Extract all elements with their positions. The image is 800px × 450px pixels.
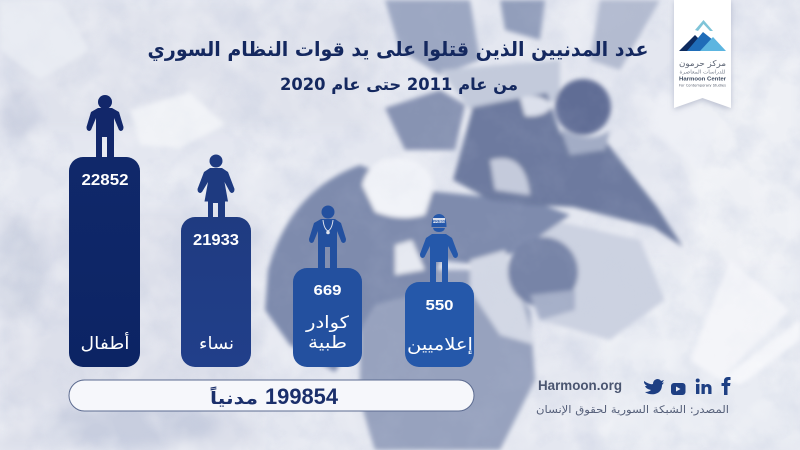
lower person and mid tone xyxy=(360,270,535,450)
upper figures xyxy=(385,0,480,75)
icon: twitter xyxy=(644,379,664,394)
lower right rubble xyxy=(690,260,790,380)
value: 22852 xyxy=(82,172,129,189)
label xyxy=(305,313,350,353)
bar: children xyxy=(69,95,140,367)
bar: media workers xyxy=(405,214,474,367)
logo text: Harmoon Center xyxy=(679,76,727,82)
logo text xyxy=(679,59,727,88)
logo mountains xyxy=(679,20,726,51)
label: أطفال xyxy=(80,332,130,354)
label: إعلاميين xyxy=(407,335,473,355)
bar: women xyxy=(181,154,251,367)
value: 669 xyxy=(314,282,342,299)
icon: linkedin xyxy=(696,378,712,394)
value: 550 xyxy=(426,297,454,314)
icon: medic xyxy=(309,206,346,268)
logo ribbon xyxy=(674,0,731,108)
title: عدد المدنيين الذين قتلوا على يد قوات النظام السوري xyxy=(148,37,648,62)
label: طبية xyxy=(308,333,347,353)
icon: child xyxy=(86,95,124,157)
icon: youtube xyxy=(671,383,686,395)
logo text: للدراسات المعاصرة xyxy=(680,70,726,76)
total pill xyxy=(69,380,474,411)
icon: woman xyxy=(198,154,234,217)
scarf and head of lower person xyxy=(470,250,535,345)
label: كوادر xyxy=(305,313,350,333)
far rescuer body xyxy=(453,93,683,247)
logo text: For Contemporary Studies xyxy=(679,82,726,88)
white helmet xyxy=(362,158,433,218)
social icons xyxy=(644,377,730,395)
bar: medical staff xyxy=(293,206,362,367)
website: Harmoon.org xyxy=(538,378,622,393)
icon: facebook xyxy=(722,377,730,395)
icon: journalist: PRESS xyxy=(433,219,446,223)
source: المصدر: الشبكة السورية لحقوق الإنسان xyxy=(536,404,729,416)
value: 21933 xyxy=(193,232,239,249)
front rescuer body xyxy=(265,165,570,372)
total pill: 199854 xyxy=(265,384,339,409)
total pill: مدنياً xyxy=(210,385,258,409)
label: نساء xyxy=(199,334,234,354)
icon: journalist xyxy=(420,214,458,282)
rubble between rescuers xyxy=(395,240,425,275)
subtitle: من عام 2011 حتى عام 2020 xyxy=(280,75,518,95)
logo text: مركز حرمون xyxy=(679,59,726,68)
